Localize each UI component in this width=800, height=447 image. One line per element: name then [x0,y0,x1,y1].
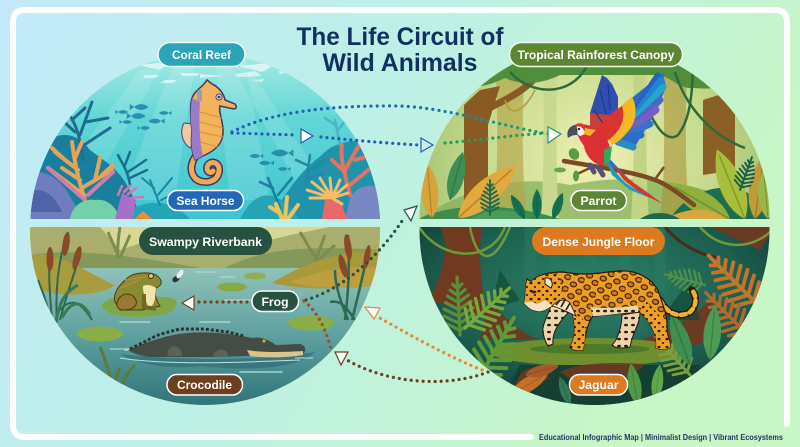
label: Crocodile [167,374,242,395]
arrow: canopy edge to parrot [445,133,546,143]
panel: rainforest canopy [420,42,770,219]
arrow: jaguar to frog [365,307,482,370]
reeds [38,232,92,322]
arrow: reef to canopy edge [321,137,433,152]
title: Wild Animals [322,49,478,77]
panel: dense jungle floor [419,227,775,407]
foreground foliage [419,207,560,219]
label: Swampy Riverbank: Swampy Riverbank [149,235,262,249]
label: Dense Jungle Floor [532,227,665,255]
label: Swampy Riverbank [139,227,272,255]
label: Coral Reef [158,42,245,66]
fish schools [116,104,294,171]
icon: crocodile [128,329,305,357]
yellow coral [270,197,298,219]
label: Parrot: Parrot [580,196,617,208]
label: Jaguar [570,374,628,395]
vines [510,66,745,148]
brain coral [70,200,120,219]
title [296,23,504,77]
label: Frog: Frog [262,297,288,309]
purple sponge [115,193,136,219]
red coral [332,140,372,195]
icon: sea horse [182,80,236,182]
arrow: frog to lily pad [182,296,247,310]
ferns [442,276,475,336]
label: Jaguar: Jaguar [578,380,619,392]
icon: fly [172,270,184,282]
arrow: frog to canopy [306,206,417,300]
large trunks [464,86,500,200]
label: Parrot [571,190,626,210]
branch [564,161,694,205]
panel: coral reef [30,42,380,219]
icon: jaguar [524,271,696,350]
label: Tropical Rainforest Canopy [510,42,682,66]
pink orange coral [48,142,113,200]
label: Coral Reef: Coral Reef [172,50,231,62]
icon: parrot [567,73,666,204]
label: Sea Horse: Sea Horse [176,196,234,208]
lily pads [244,272,266,280]
canopy [481,64,711,88]
label: Sea Horse [168,190,244,210]
label: Tropical Rainforest Canopy: Tropical Rainforest Canopy [518,50,675,62]
icon: frog [114,273,161,310]
arrow: frog to crocodile [304,301,331,349]
title: The Life Circuit of [296,23,504,51]
ground [490,338,690,366]
label: Crocodile: Crocodile [177,380,232,392]
anemone [322,200,347,219]
rocks [30,172,76,219]
arrow: sea horse to parrot [232,106,561,143]
arrow: sea horse to mid reef [232,129,313,143]
label: Frog [252,291,298,312]
panel: swampy riverbank [30,227,380,408]
arrow: jaguar to crocodile [335,352,488,381]
label: Dense Jungle Floor: Dense Jungle Floor [542,235,655,249]
dark branch coral [62,102,110,160]
